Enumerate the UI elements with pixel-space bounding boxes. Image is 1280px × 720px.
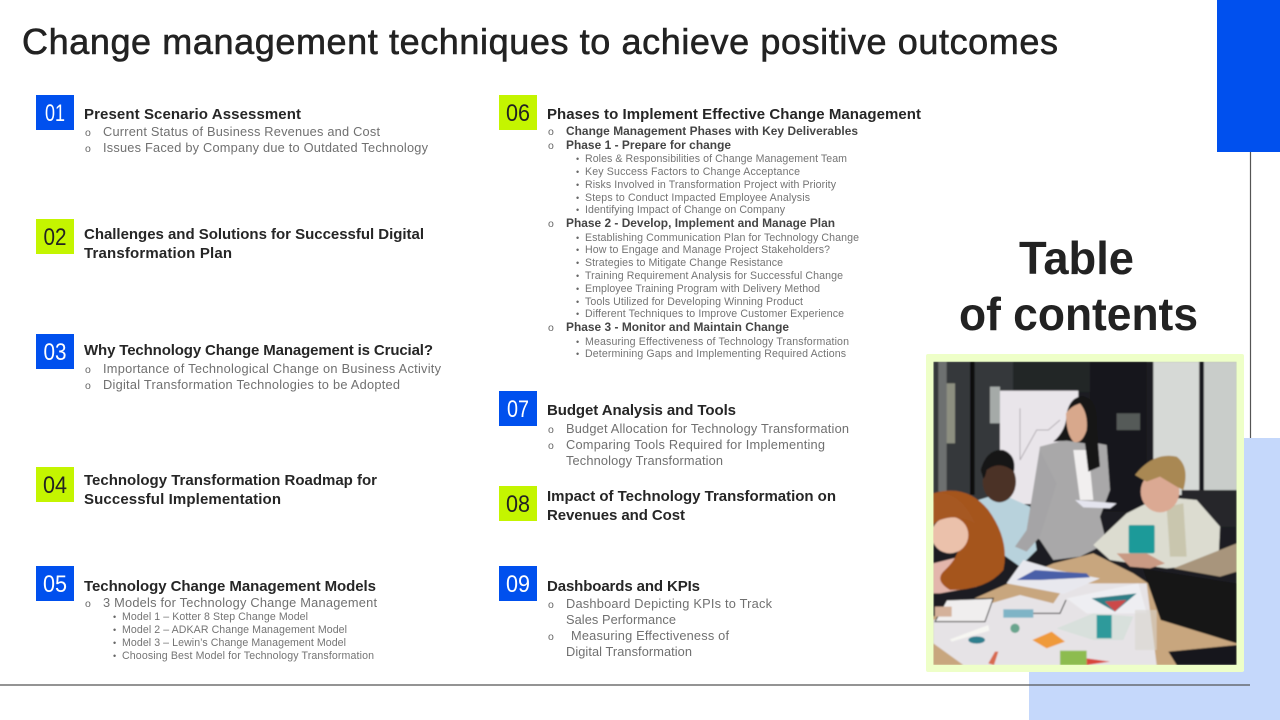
list 06: o <box>548 126 554 138</box>
list 09: o <box>548 599 554 611</box>
heading 04 <box>84 472 377 508</box>
list 03: Importance of Technological Change on Business Activity <box>103 361 442 376</box>
list 06: o <box>548 218 554 230</box>
list 05: • <box>113 625 116 635</box>
list 06: • <box>576 258 579 268</box>
badge 04: 04 <box>43 472 67 499</box>
list 06: Phase 2 - Develop, Implement and Manage Plan <box>566 216 835 230</box>
list 06: • <box>576 180 579 190</box>
list 06: o <box>548 140 554 152</box>
list 06 <box>548 124 859 360</box>
section 02 <box>36 219 424 262</box>
heading 08: Revenues and Cost <box>547 507 685 524</box>
list 05: • <box>113 638 116 648</box>
heading: table of contents: Table <box>1019 232 1134 284</box>
list 06: Establishing Communication Plan for Technology Change <box>585 232 859 244</box>
heading 09: Dashboards and KPIs <box>547 578 700 595</box>
heading 07: Budget Analysis and Tools <box>547 402 736 419</box>
heading 02: Challenges and Solutions for Successful Digital <box>84 226 424 243</box>
list 06: Employee Training Program with Delivery Method <box>585 283 820 295</box>
left man <box>978 493 1037 567</box>
list 05: Model 2 – ADKAR Change Management Model <box>122 624 347 636</box>
heading 04: Successful Implementation <box>84 491 281 508</box>
section 09 <box>499 566 773 659</box>
section 08 <box>499 486 836 524</box>
decorative light blue block bottom right <box>1029 438 1280 720</box>
section 04 <box>36 467 377 508</box>
badge 01 <box>36 95 74 130</box>
badge 07: 07 <box>507 396 529 423</box>
heading 04: Technology Transformation Roadmap for <box>84 472 377 489</box>
list 06: Strategies to Mitigate Change Resistance <box>585 257 783 269</box>
list 06: How to Engage and Manage Project Stakeholders? <box>585 244 830 256</box>
list 03 <box>85 361 442 392</box>
section 06 <box>499 95 921 360</box>
list 09: Measuring Effectiveness of <box>571 628 729 643</box>
badge 06: 06 <box>506 100 530 127</box>
heading: table of contents: of contents <box>959 288 1198 340</box>
list 01 <box>85 124 429 155</box>
list 09 <box>548 596 773 659</box>
badge 03: 03 <box>44 339 66 366</box>
red-haired woman <box>933 557 977 593</box>
list 05: o <box>85 598 91 610</box>
heading 01: Present Scenario Assessment <box>84 106 301 123</box>
list 05: Model 3 – Lewin’s Change Management Model <box>122 637 346 649</box>
heading: table of contents <box>959 232 1198 340</box>
list 09: Digital Transformation <box>566 644 692 659</box>
list 06: Risks Involved in Transformation Project with Priority <box>585 179 837 191</box>
list 09: Dashboard Depicting KPIs to Track <box>566 596 773 611</box>
badge 01: 01 <box>45 100 65 127</box>
laptop <box>1143 568 1237 643</box>
badge 09: 09 <box>506 571 530 598</box>
list 06: Roles & Responsibilities of Change Management Team <box>585 153 847 165</box>
list 01: Issues Faced by Company due to Outdated Technology <box>103 140 429 155</box>
list 01: Current Status of Business Revenues and Cost <box>103 124 380 139</box>
badge 02 <box>36 219 74 254</box>
list 06: Key Success Factors to Change Acceptance <box>585 166 800 178</box>
list 06: • <box>576 233 579 243</box>
list 06: • <box>576 245 579 255</box>
standing woman <box>1027 438 1110 560</box>
list 05: Choosing Best Model for Technology Transformation <box>122 650 374 662</box>
right man <box>1093 497 1220 568</box>
list 06: Phase 1 - Prepare for change <box>566 138 731 152</box>
badge 02: 02 <box>44 224 66 251</box>
list 05: • <box>113 612 116 622</box>
list 07: o <box>548 440 554 452</box>
list 06: • <box>576 167 579 177</box>
badge 05: 05 <box>43 571 67 598</box>
heading 08 <box>547 488 836 524</box>
list 07 <box>548 421 849 468</box>
list 06: Change Management Phases with Key Deliverables <box>566 124 858 138</box>
list 06: Steps to Conduct Impacted Employee Analysis <box>585 192 810 204</box>
list 03: Digital Transformation Technologies to be Adopted <box>103 377 400 392</box>
list 06: • <box>576 337 579 347</box>
list 06: Phase 3 - Monitor and Maintain Change <box>566 320 789 334</box>
heading 02 <box>84 226 424 262</box>
list 01: o <box>85 127 91 139</box>
list 06: • <box>576 154 579 164</box>
papers <box>933 583 1157 665</box>
list 06: Measuring Effectiveness of Technology Transformation <box>585 336 849 348</box>
list 06: • <box>576 349 579 359</box>
list 03: o <box>85 380 91 392</box>
list 03: o <box>85 364 91 376</box>
list 05 <box>85 595 377 662</box>
heading 06: Phases to Implement Effective Change Management <box>547 106 921 123</box>
section 01 <box>36 95 429 155</box>
list 06: Tools Utilized for Developing Winning Product <box>585 296 803 308</box>
table <box>933 553 1237 665</box>
list 06: o <box>548 322 554 334</box>
decorative blue block top right <box>1217 0 1280 152</box>
heading 05: Technology Change Management Models <box>84 578 376 595</box>
badge 05 <box>36 566 74 601</box>
heading 08: Impact of Technology Transformation on <box>547 488 836 505</box>
list 06: Determining Gaps and Implementing Required Actions <box>585 348 846 360</box>
list 01: o <box>85 143 91 155</box>
list 06: • <box>576 297 579 307</box>
list 07: Comparing Tools Required for Implementing <box>566 437 825 452</box>
badge 08: 08 <box>506 491 530 518</box>
list 05: • <box>113 651 116 661</box>
list 05: 3 Models for Technology Change Management <box>103 595 377 610</box>
list 06: Different Techniques to Improve Customer Experience <box>585 308 844 320</box>
badge 08 <box>499 486 537 521</box>
badge 06 <box>499 95 537 130</box>
frame lines <box>0 152 1250 685</box>
badge 07 <box>499 391 537 426</box>
list 05: Model 1 – Kotter 8 Step Change Model <box>122 611 308 623</box>
list 06: • <box>576 205 579 215</box>
photo frame <box>926 354 1244 672</box>
list 06: • <box>576 309 579 319</box>
list 07: Technology Transformation <box>566 453 723 468</box>
list 07: Budget Allocation for Technology Transformation <box>566 421 849 436</box>
list 06: • <box>576 284 579 294</box>
list 06: • <box>576 271 579 281</box>
section 05 <box>36 566 377 662</box>
badge 09 <box>499 566 537 601</box>
list 09: Sales Performance <box>566 612 676 627</box>
list 07: o <box>548 424 554 436</box>
list 06: • <box>576 193 579 203</box>
section 07 <box>499 391 849 468</box>
list 06: Identifying Impact of Change on Company <box>585 204 786 216</box>
badge 04 <box>36 467 74 502</box>
photo: team meeting around table <box>932 362 1237 665</box>
section 03 <box>36 334 442 392</box>
badge 03 <box>36 334 74 369</box>
heading 02: Transformation Plan <box>84 245 232 262</box>
heading 03: Why Technology Change Management is Crucial? <box>84 342 433 359</box>
list 09: o <box>548 631 554 643</box>
list 06: Training Requirement Analysis for Successful Change <box>585 270 843 282</box>
title: Change management techniques to achieve positive outcomes <box>22 21 1058 62</box>
